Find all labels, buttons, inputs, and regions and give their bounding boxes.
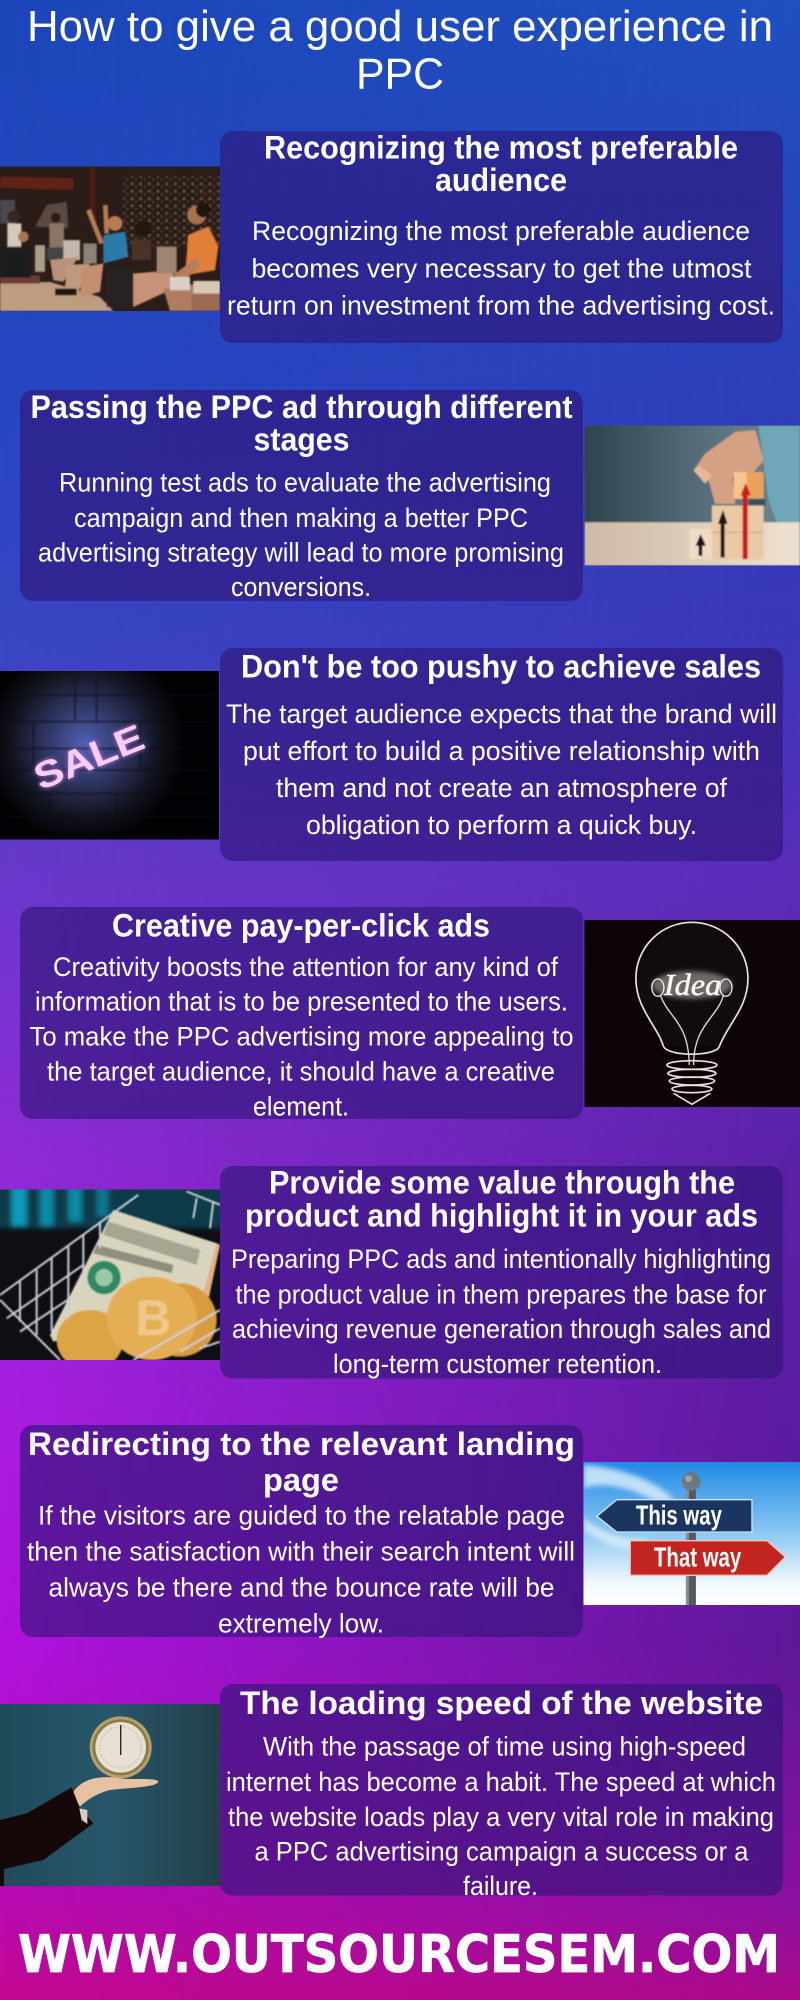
filament word: Idea [663,968,721,1002]
panel: provide some value [220,1164,783,1379]
body text: the target audience, it should have a creative [47,1056,555,1086]
body text: achieving revenue generation through sales and [232,1314,771,1344]
body text: return on investment from the advertising cost. [227,290,775,320]
heading: Don't be too pushy to achieve sales [241,648,761,684]
body text [226,1732,776,1901]
heading: Recognizing the most preferable [264,130,738,166]
body text: Recognizing the most preferable audience [252,216,750,246]
body text [231,1244,771,1379]
sign text: that way: That way [654,1542,742,1573]
heading [30,389,573,458]
photo: audience crowd [0,166,220,311]
panel: loading speed of the website [220,1684,783,1901]
heading: Redirecting to the relevant landing [28,1426,575,1462]
heading: audience [435,162,567,198]
heading: page [263,1462,339,1498]
body text [27,1500,575,1638]
heading [245,1164,758,1234]
body text: With the passage of time using high-speed [263,1732,746,1762]
photo: hand holding a clock [0,1704,220,1886]
body text: Creativity boosts the attention for any kind of [53,952,558,982]
body text: becomes very necessary to get the utmost [252,254,752,284]
photo: idea light bulb [584,920,800,1107]
panel: passing the ad through stages [20,389,583,602]
body text: extremely low. [218,1608,384,1638]
body text: Running test ads to evaluate the advertising [59,468,551,498]
heading: stages [254,422,350,458]
title: How to give a good user experience in [27,2,773,51]
body text: Preparing PPC ads and intentionally highlighting [231,1244,771,1274]
body text: If the visitors are guided to the relatable page [38,1500,565,1530]
photo: cash and bitcoin in shopping basket [0,1190,220,1360]
body text: put effort to build a positive relationship with [243,736,760,766]
panel: don't be too pushy [220,648,783,861]
body text [30,952,574,1122]
body text: failure. [463,1871,538,1901]
body text: them and not create an atmosphere of [276,773,727,803]
body text [38,468,564,602]
heading [28,1426,575,1498]
panel: recognizing the audience [220,130,783,343]
body text [227,216,775,320]
bitcoin symbol: B [135,1290,171,1346]
body text: The target audience expects that the brand will [226,699,777,729]
heading [264,130,738,198]
body text: conversions. [231,572,371,602]
body text: To make the PPC advertising more appealing to [30,1022,574,1052]
body text: internet has become a habit. The speed at which [226,1767,776,1797]
panel: creative pay-per-click ads [20,907,583,1122]
body text: then the satisfaction with their search intent will [27,1536,575,1566]
panel: redirecting to landing page [20,1425,583,1638]
title [27,2,773,98]
heading: product and highlight it in your ads [245,1198,758,1234]
heading: Provide some value through the [269,1164,735,1200]
photo: this way / that way signpost [584,1462,800,1605]
body text: element. [253,1092,349,1122]
body text: campaign and then making a better PPC [74,503,528,533]
sign text: this way: This way [636,1500,722,1531]
body text: long-term customer retention. [333,1349,662,1379]
neon SALE lettering: SALE [28,716,150,798]
heading: Passing the PPC ad through different [30,389,573,425]
body text: always be there and the bounce rate will be [48,1572,554,1602]
body text: the product value in them prepares the base for [236,1280,767,1310]
heading: Creative pay-per-click ads [112,908,490,944]
body text: the website loads play a very vital role in making [228,1802,774,1832]
neon glow: SALE [28,716,150,798]
body text: advertising strategy will lead to more promising [38,538,564,568]
body text [226,699,777,840]
body text: a PPC advertising campaign a success or a [254,1836,749,1866]
body text: information that is to be presented to the users. [35,986,568,1016]
heading: The loading speed of the website [240,1685,763,1721]
title: PPC [356,50,444,98]
photo: neon sale sign on brick wall [0,671,219,840]
body text: obligation to perform a quick buy. [306,810,697,840]
photo: hand stacking blocks with arrows [584,426,800,566]
